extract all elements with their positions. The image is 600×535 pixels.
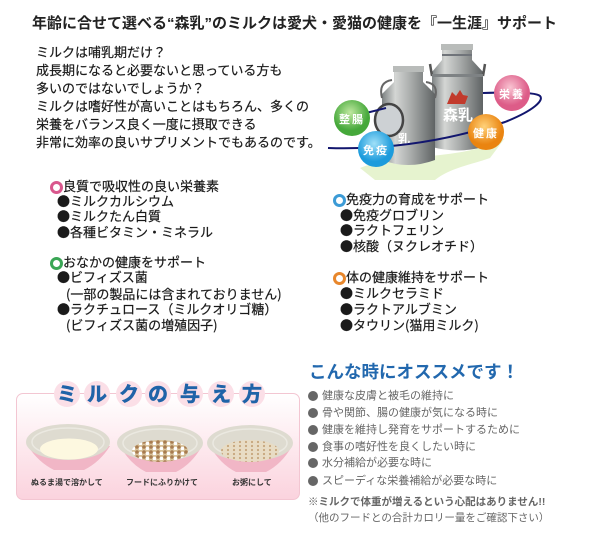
nutrient list: 免疫力: ●ラクトフェリン <box>340 220 444 239</box>
bowl captions: フードにふりかけて <box>126 478 198 487</box>
illustration: milk cans with health orbs <box>328 44 542 180</box>
large can: 森乳 <box>443 106 473 124</box>
nutrient list: 良質: ●各種ビタミン・ミネラル <box>57 222 213 241</box>
nutrient list: おなか: おなかの健康をサポート <box>63 252 206 271</box>
nutrient list: 良質: 良質で吸収性の良い栄養素 <box>63 176 219 195</box>
panel heading: ミルクの与え方: ク <box>119 383 139 406</box>
intro text <box>36 45 321 150</box>
orb: 免疫 <box>358 131 394 167</box>
intro text: 栄養をバランス良く一度に摂取できる <box>36 117 256 132</box>
bowl captions: お粥にして <box>232 478 272 487</box>
nutrient list: 免疫力 <box>333 189 489 255</box>
nutrient list: おなか: (ビフィズス菌の増殖因子) <box>66 315 218 334</box>
panel heading: ミルクの与え方: ミ <box>57 384 77 406</box>
nutrient list: 良質: ●ミルクたん白質 <box>57 206 161 225</box>
orb: 整腸: 整腸 <box>339 112 365 126</box>
heading: recommended: こんな時にオススメです！ <box>309 362 519 382</box>
panel heading: ミルクの与え方 <box>54 381 265 407</box>
bowl captions: ぬるま湯で溶かして <box>31 478 103 487</box>
intro text: ミルクは哺乳期だけ？ <box>36 45 166 60</box>
intro text: 成長期になると必要ないと思っている方も <box>36 63 282 78</box>
recommendation list: スピーディな栄養補給が必要な時に <box>322 475 497 487</box>
orb: 栄養: 栄養 <box>499 87 525 101</box>
title: 年齢に合せて選べる“森乳”のミルクは愛犬・愛猫の健康を『一生涯』サポート <box>32 15 557 32</box>
green shadow <box>360 138 505 180</box>
recommendation list: 健康を維持し発育をサポートするために <box>322 424 520 436</box>
note sub: （他のフードとの合計カロリー量をご確認下さい） <box>308 512 549 524</box>
nutrient list: 体の健康: ●ラクトアルブミン <box>340 299 457 318</box>
nutrient list: 免疫力: 免疫力の育成をサポート <box>346 189 489 208</box>
bowl captions <box>31 478 272 487</box>
nutrient list: 免疫力: ●免疫グロブリン <box>340 205 444 224</box>
recommendation list: 健康な皮膚と被毛の維持に <box>322 390 454 402</box>
orb: 栄養 <box>494 75 530 111</box>
recommendation list: 水分補給が必要な時に <box>322 457 432 469</box>
intro text: 非常に効率の良いサプリメントでもあるのです。 <box>36 135 321 150</box>
bowl: sprinkled <box>117 425 203 472</box>
nutrient list: 体の健康: ●タウリン(猫用ミルク) <box>340 315 479 334</box>
bowls <box>26 424 293 472</box>
orbit <box>328 92 541 148</box>
small can <box>375 66 436 165</box>
large can <box>430 44 485 150</box>
panel heading: ミルクの与え方: の <box>148 384 168 406</box>
bowl: milk <box>26 424 110 470</box>
panel heading: ミルクの与え方: 与 <box>180 383 200 406</box>
nutrient list: おなか: ●ラクチュロース（ミルクオリゴ糖） <box>57 299 277 318</box>
nutrient list: 良質: ●ミルクカルシウム <box>57 191 174 210</box>
orb: 整腸 <box>334 100 370 136</box>
small can: 乳 <box>398 131 410 146</box>
nutrient list: おなか: ●ビフィズス菌 <box>57 267 148 286</box>
nutrient list: 体の健康 <box>333 267 489 334</box>
nutrient list: 体の健康: 体の健康維持をサポート <box>346 267 489 286</box>
panel heading: ミルクの与え方: 方 <box>242 383 262 406</box>
nutrient list: おなか <box>50 252 282 334</box>
panel heading: ミルクの与え方: え <box>211 383 231 406</box>
bowl: porridge <box>207 425 293 472</box>
recommendation list: 食事の嗜好性を良くしたい時に <box>322 441 476 453</box>
orb: 健康 <box>468 114 504 150</box>
recommendation list <box>308 390 520 487</box>
nutrient list: 良質 <box>50 176 219 241</box>
intro text: 多いのではないでしょうか？ <box>36 81 205 96</box>
orb: 免疫: 免疫 <box>363 143 389 157</box>
nutrient list: 免疫力: ●核酸（ヌクレオチド） <box>340 236 483 255</box>
orb: 健康: 健康 <box>473 126 499 140</box>
recommendation list: 骨や関節、腸の健康が気になる時に <box>322 407 498 419</box>
nutrient list: 体の健康: ●ミルクセラミド <box>340 283 444 302</box>
panel: how to serve milk <box>16 393 300 500</box>
intro text: ミルクは嗜好性が高いことはもちろん、多くの <box>36 99 309 114</box>
note: ※ミルクで体重が増えるという心配はありません!! <box>308 496 545 508</box>
nutrient list: おなか: (一部の製品には含まれておりません) <box>66 284 282 303</box>
panel heading: ミルクの与え方: ル <box>87 384 107 406</box>
